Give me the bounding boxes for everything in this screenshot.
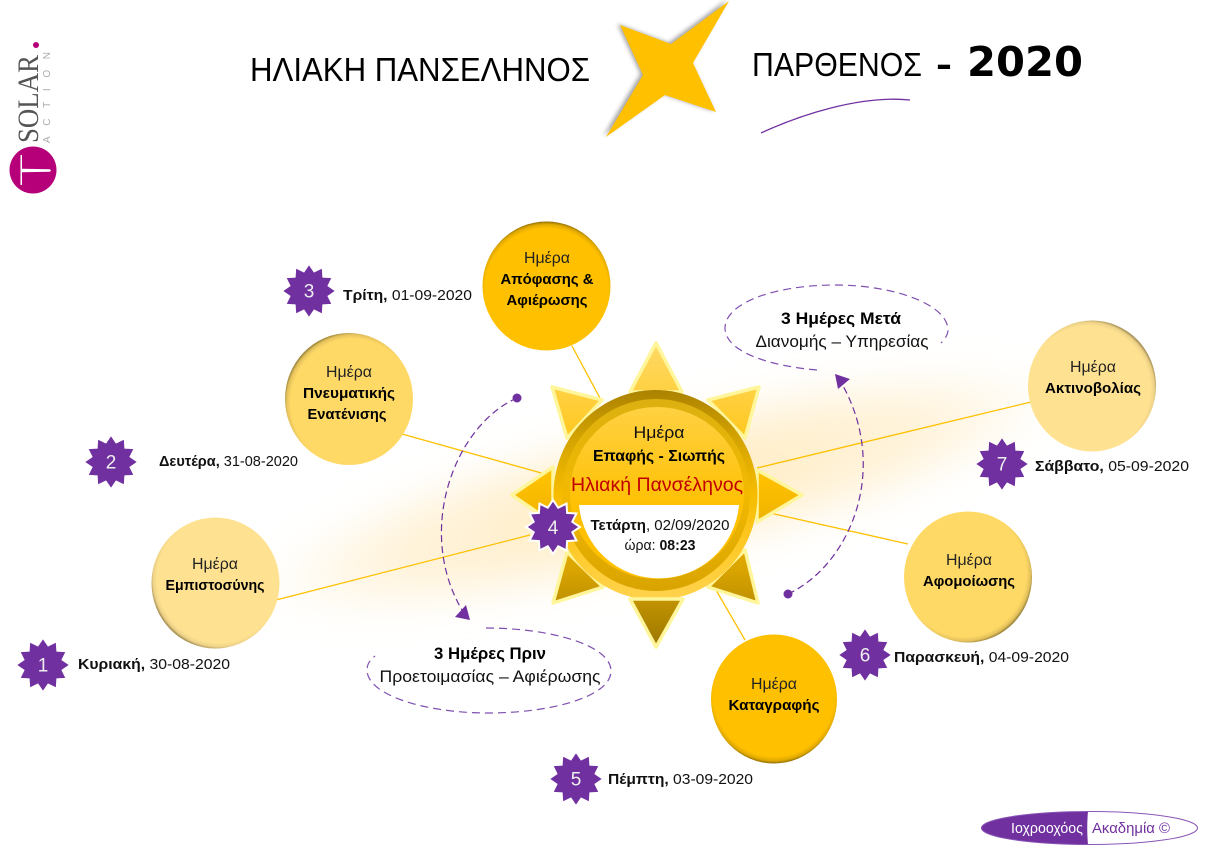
day badge 1 (17, 639, 69, 691)
day 2 circle: Ημέρα (326, 364, 372, 381)
footer badge: academy (981, 812, 1198, 844)
day 3 circle: Αφιέρωσης (506, 292, 588, 309)
callout: 3 days after: Διανομής – Υπηρεσίας (756, 333, 929, 351)
callout: 3 days before: Προετοιμασίας – Αφιέρωσης (380, 668, 601, 686)
icon: four-point star (604, 0, 729, 137)
day 6 circle: Αφομοίωσης (923, 573, 1015, 590)
day badge 1: 1 (38, 656, 48, 677)
sun text: Επαφής - Σιωπής (593, 448, 725, 465)
day 3 circle: Ημέρα (524, 250, 570, 267)
day 5 circle: Καταγραφής (728, 697, 820, 714)
date label 7: Σάββατο, 05-09-2020 (1035, 458, 1189, 475)
title left: ΗΛΙΑΚΗ ΠΑΝΣΕΛΗΝΟΣ (250, 51, 590, 88)
day 7 circle: Ακτινοβολίας (1045, 380, 1141, 397)
background glow band (234, 315, 1086, 669)
callout: 3 days before: 3 Ημέρες Πριν (434, 645, 546, 663)
callout: 3 days after: 3 Ημέρες Μετά (781, 310, 901, 328)
sun text: Ηλιακή Πανσέληνος (571, 475, 743, 496)
day badge 7 (976, 438, 1028, 490)
date label 5: Πέμπτη, 03-09-2020 (608, 771, 753, 788)
day 1 circle: Εμπιστοσύνης (166, 577, 265, 594)
day badge 5: 5 (571, 770, 581, 791)
sun rays (512, 343, 802, 603)
title right: - (936, 43, 952, 84)
arrow: before full moon (441, 394, 522, 620)
day badge 3: 3 (304, 282, 314, 303)
connector lines (276, 346, 1031, 640)
day 5 circle (711, 634, 837, 764)
logo disc (10, 146, 56, 194)
sun text: ώρα: 08:23 (624, 537, 696, 554)
sun text (571, 423, 743, 554)
sun white date segment (579, 505, 739, 578)
day 2 circle: Ενατένισης (308, 406, 387, 423)
day 7 circle (1028, 320, 1156, 452)
logo wordmark: SOLAR (12, 55, 45, 143)
title right: 2020 (967, 38, 1083, 86)
day 3 circle (482, 222, 610, 350)
footer badge: academy: Ακαδημία © (1092, 821, 1170, 837)
logo dot (33, 42, 39, 48)
title right: ΠΑΡΘΕΝΟΣ (752, 46, 922, 83)
day badge 3 (283, 265, 335, 317)
day badge 6 (839, 629, 891, 681)
date label 1: Κυριακή, 30-08-2020 (78, 656, 230, 673)
day 3 circle: Απόφασης & (500, 271, 594, 288)
day badge 2: 2 (106, 453, 116, 474)
title swoosh (761, 99, 910, 133)
day 2 circle: Πνευματικής (303, 385, 395, 402)
day 7 circle: Ημέρα (1070, 359, 1116, 376)
date label 6: Παρασκευή, 04-09-2020 (894, 649, 1069, 666)
day badge 5 (550, 753, 602, 805)
day badge 4: 4 (548, 518, 559, 539)
day 6 circle (904, 512, 1032, 642)
sun bottom ray (630, 599, 683, 647)
day badge 7: 7 (997, 455, 1007, 476)
callout: 3 days after (725, 285, 948, 370)
sun inner disc (570, 407, 744, 579)
day badge 4 (526, 500, 580, 554)
date label 2: Δευτέρα, 31-08-2020 (159, 453, 298, 470)
sun text: Τετάρτη, 02/09/2020 (590, 517, 730, 534)
callout: 3 days before (367, 628, 611, 713)
arrow: after full moon (784, 374, 863, 598)
date label 3: Τρίτη, 01-09-2020 (343, 287, 472, 304)
day 6 circle: Ημέρα (946, 552, 992, 569)
footer badge: academy: Ιοχροοχόος (1011, 821, 1083, 837)
sun outer ring (554, 390, 758, 600)
title right (752, 38, 1083, 86)
day 2 circle (285, 333, 413, 465)
day badge 6: 6 (860, 646, 870, 667)
sun (512, 343, 802, 647)
logo subtitle: ACTION (42, 52, 53, 143)
day 5 circle: Ημέρα (751, 676, 797, 693)
logo: Solar Action (10, 42, 56, 194)
sun text: Ημέρα (634, 423, 685, 442)
day 1 circle: Ημέρα (192, 556, 238, 573)
day 1 circle (152, 518, 280, 648)
day badge 2 (85, 436, 137, 488)
